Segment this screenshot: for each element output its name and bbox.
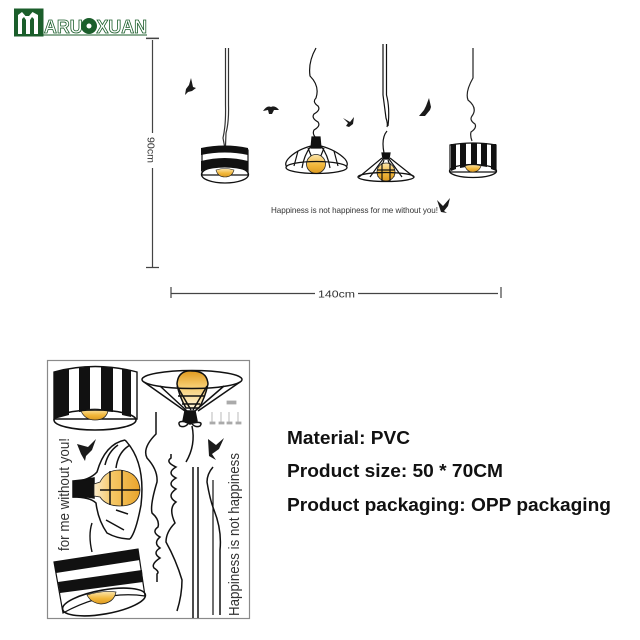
dimension: 140cm width: 140cm: [318, 288, 355, 300]
lamp 4: vertical stripes: [450, 48, 496, 178]
sticker: vertical text right: Happiness is not happiness: [226, 453, 243, 616]
logo: Maruoxuan: [14, 8, 159, 38]
lamp 1: horizontal stripes: [201, 48, 248, 183]
dimension: 140cm width: [171, 287, 501, 300]
caption with bird: Happiness is not happiness for me without you!: [271, 206, 438, 215]
lamp 2: wire dome with bulb: [286, 48, 347, 174]
sticker: horizontal-stripe lamp: [54, 523, 147, 621]
sticker: small preview lamps: [210, 401, 241, 424]
sticker: long cords: [146, 412, 220, 618]
birds: [185, 78, 431, 127]
spec: packaging: Product packaging: OPP packaging: [287, 494, 611, 515]
lamp 3: cone shade with bulb: [358, 44, 414, 182]
dimension: 90cm height: 90cm: [144, 137, 156, 163]
sticker sheet: [48, 360, 250, 621]
sticker: vertical text left: for me without you!: [56, 438, 73, 551]
logo: Maruoxuan: ARUOXUAN: [44, 17, 147, 37]
sticker: cone lamp with bow: [142, 370, 242, 462]
spec: product size: Product size: 50 * 70CM: [287, 460, 503, 481]
sticker: vertical-stripe lamp: [54, 366, 137, 430]
caption with bird: [271, 198, 450, 215]
dimension: 90cm height: [144, 38, 159, 268]
sticker: birds: [77, 438, 224, 461]
spec: material: Material: PVC: [287, 427, 410, 448]
sticker: sideways lamp: [73, 440, 142, 539]
